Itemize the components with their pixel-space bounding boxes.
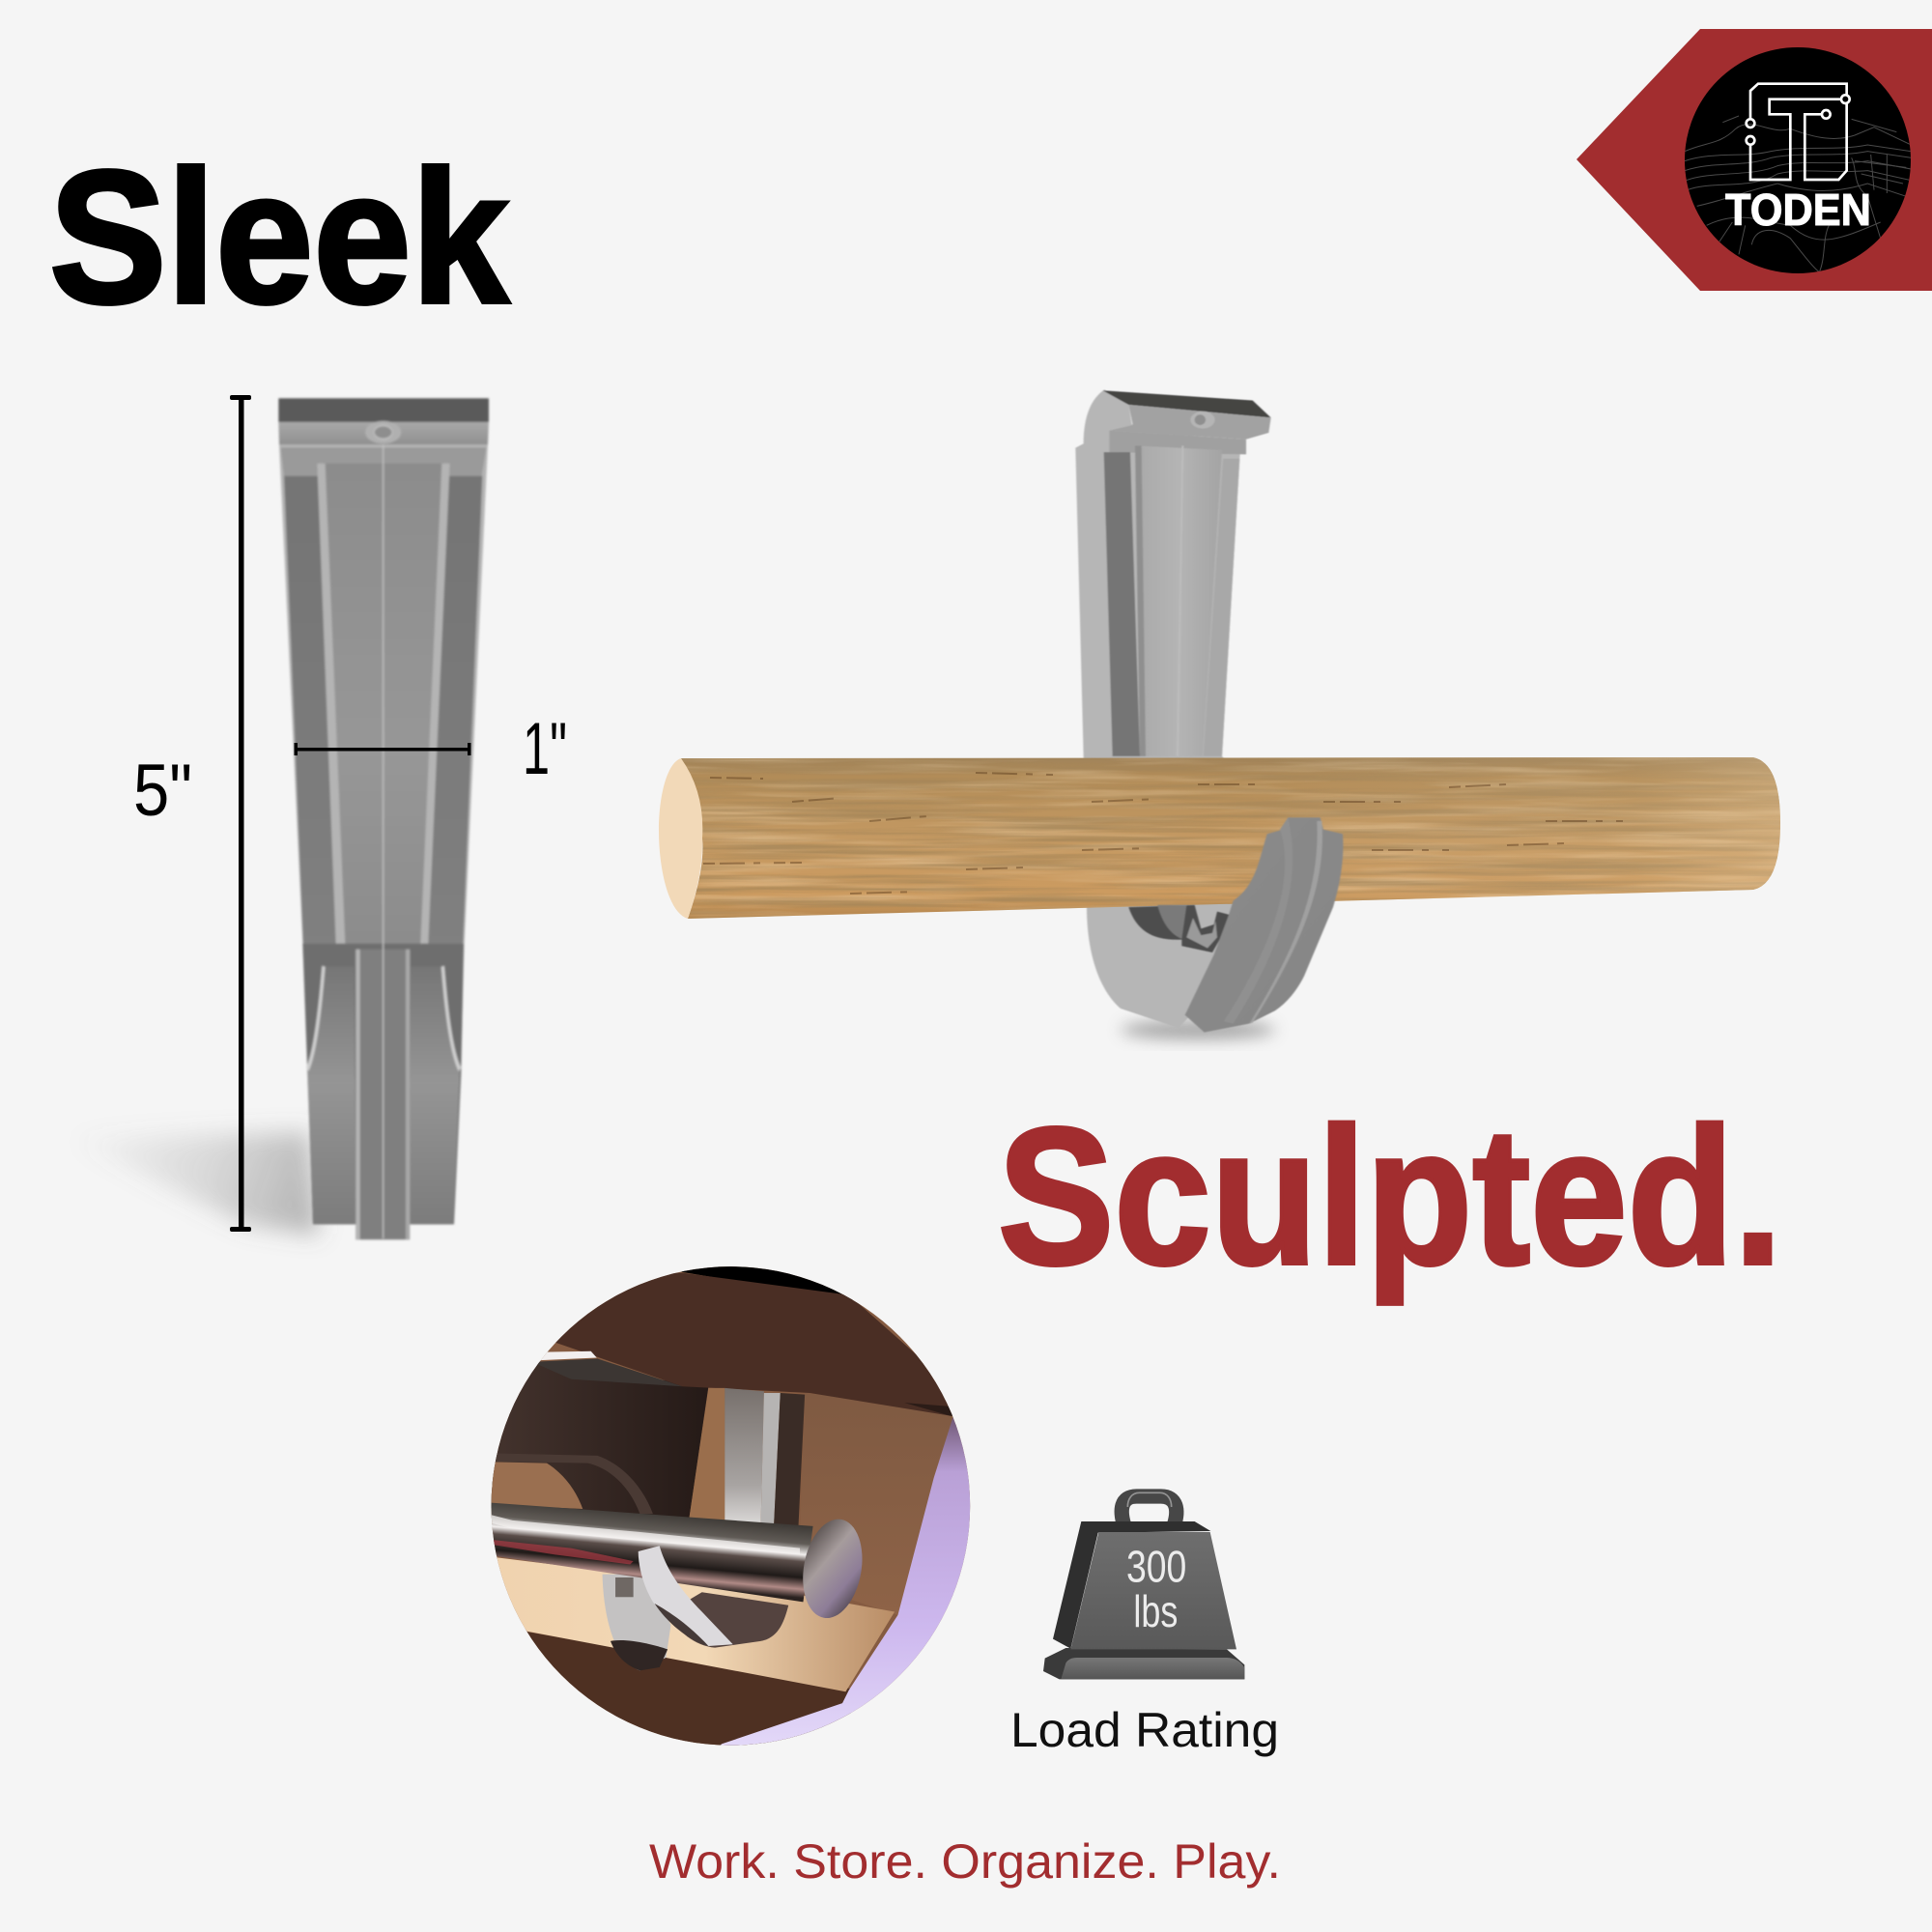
front-view bracket (278, 398, 489, 1239)
rod end knob (803, 1519, 862, 1618)
weight base (1043, 1648, 1244, 1679)
brand badge (1577, 29, 1932, 291)
photo background (491, 1266, 970, 1746)
heading: Sleek: Sleek (49, 131, 510, 343)
bottom brown ledge (527, 1632, 851, 1746)
bracket body (279, 444, 488, 1239)
white hook (639, 1546, 733, 1646)
back plate (1075, 389, 1268, 1028)
cream lit band (473, 1554, 895, 1691)
caption: Load Rating: Load Rating (1010, 1703, 1279, 1757)
rod body (681, 757, 1780, 919)
top brown shelf (555, 1273, 952, 1416)
rod end cap (659, 758, 702, 919)
top dark face (1103, 390, 1271, 417)
dark left wall (491, 1362, 709, 1517)
shelf highlight (539, 1351, 597, 1360)
shelf underside line (905, 1403, 952, 1416)
top black strip (682, 1266, 853, 1300)
hook body (1185, 817, 1343, 1033)
screw (1190, 412, 1215, 429)
bracket lower section (302, 944, 464, 1224)
shadow: hook (1121, 1020, 1275, 1039)
side-view bracket: hook (1128, 817, 1343, 1033)
right face (1204, 459, 1239, 756)
side-view bracket: back plate (1075, 389, 1271, 1028)
tan patch left (491, 1462, 583, 1509)
bracket center panel (322, 464, 444, 944)
lower dark hook shadow (684, 1592, 788, 1648)
bracket screw (365, 421, 401, 443)
lifestyle photo circle (491, 1266, 970, 1746)
dimension line: 1 inch width (294, 743, 471, 755)
right tan wall (858, 1408, 954, 1615)
bracket top cap (278, 398, 489, 422)
dark channel (1104, 452, 1140, 756)
hook cutout (1128, 905, 1234, 952)
center bracket strip (689, 1388, 724, 1523)
logo wordmark: TODEN (1725, 185, 1871, 235)
badge arrow shape (1577, 29, 1932, 291)
weight label: 300: 300 (1126, 1541, 1186, 1591)
chrome rod (487, 1502, 813, 1602)
icon: 300 lbs weight (1043, 1492, 1244, 1679)
weight handle (1122, 1496, 1177, 1526)
tagline: Work. Store. Organize. Play. (649, 1834, 1281, 1889)
fabric (721, 1417, 970, 1746)
weight label: lbs: lbs (1133, 1586, 1178, 1636)
dimension label: 5 inch: 5" (133, 750, 192, 832)
lower back plate (603, 1575, 671, 1670)
wooden rod (659, 757, 1780, 919)
central panel (1135, 445, 1222, 756)
cap band (1109, 405, 1271, 440)
heading: Sculpted.: Sculpted. (998, 1087, 1782, 1305)
dimension label: 1 inch: 1" (523, 708, 567, 790)
logo: Toden circle (1685, 47, 1911, 273)
shadow: left bracket (68, 1132, 319, 1235)
weight body (1053, 1521, 1210, 1649)
dimension line: 5 inch height (230, 395, 251, 1232)
